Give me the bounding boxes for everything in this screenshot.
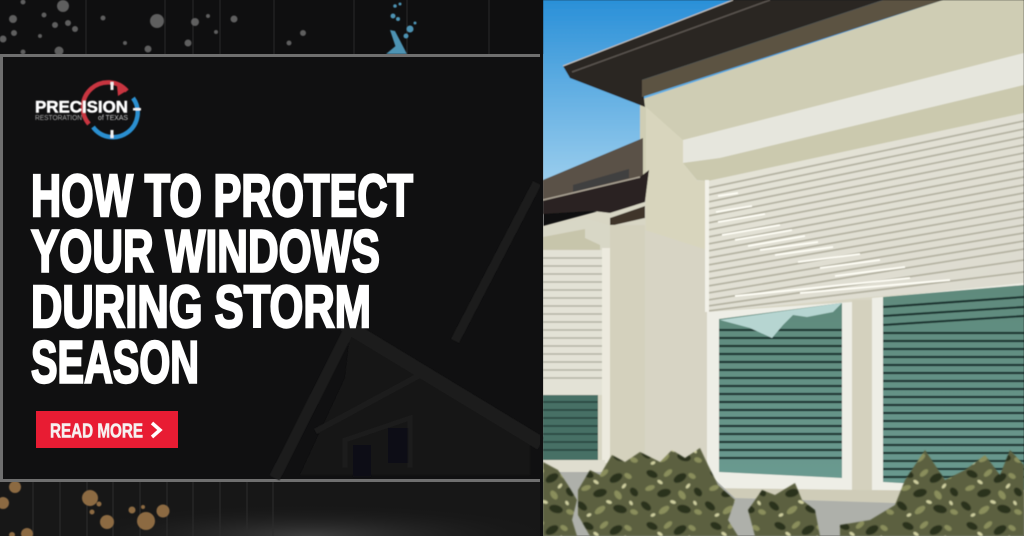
soffit — [642, 0, 943, 97]
faded house behind card — [277, 187, 535, 477]
shutter highlights — [716, 193, 950, 296]
button: read more — [36, 411, 178, 448]
panel divider — [540, 0, 543, 536]
bush: centre — [748, 483, 820, 536]
upper gutter — [563, 0, 883, 107]
left wall box — [543, 218, 612, 252]
left window — [543, 395, 598, 460]
title: SEASON — [31, 328, 199, 396]
background grid: top strip — [86, 0, 489, 54]
mullion wall — [852, 300, 872, 492]
logo: of TEXAS — [98, 115, 128, 122]
button: read more: READ MORE — [50, 420, 143, 442]
left wall — [610, 225, 645, 465]
logo: PRECISION — [35, 98, 128, 116]
wall — [543, 0, 1024, 536]
icon: chevron — [152, 423, 160, 437]
right window slats — [883, 297, 1024, 477]
shutter box — [683, 53, 1024, 163]
lower wall — [543, 472, 1024, 536]
left window frame — [707, 302, 852, 490]
left shutter — [543, 250, 602, 395]
photo: house with roller shutters — [543, 0, 1024, 536]
background grid: bottom strip — [0, 482, 543, 536]
panel: dark left background — [0, 0, 543, 536]
left window slats — [719, 330, 842, 458]
logo: RESTORATION — [35, 115, 82, 122]
bushes — [543, 448, 1024, 536]
panel: main dark card — [2, 56, 542, 480]
logo — [35, 82, 141, 138]
title: DURING STORM — [31, 273, 371, 340]
bush: right — [840, 450, 1024, 536]
right window frame — [872, 283, 1024, 492]
main shutter — [708, 113, 1024, 312]
logo ring — [83, 82, 138, 137]
splatter: blue paint top strip — [386, 2, 416, 54]
glass reflection — [720, 303, 842, 338]
left gutter — [543, 170, 649, 214]
splatter: grey paint top strip — [0, 0, 306, 56]
bush: far left — [543, 462, 577, 536]
left window glass — [719, 303, 842, 478]
shutter slats — [708, 121, 1024, 311]
pillar — [645, 107, 707, 470]
title: HOW TO PROTECT — [31, 162, 413, 229]
title: YOUR WINDOWS — [31, 218, 380, 284]
bush: centre left — [578, 448, 738, 536]
right window glass — [883, 285, 1024, 490]
title — [31, 162, 413, 396]
splatter: tan paint bottom strip — [0, 481, 170, 536]
sky — [543, 0, 1024, 190]
left roof — [543, 138, 643, 202]
sill — [707, 488, 1024, 507]
